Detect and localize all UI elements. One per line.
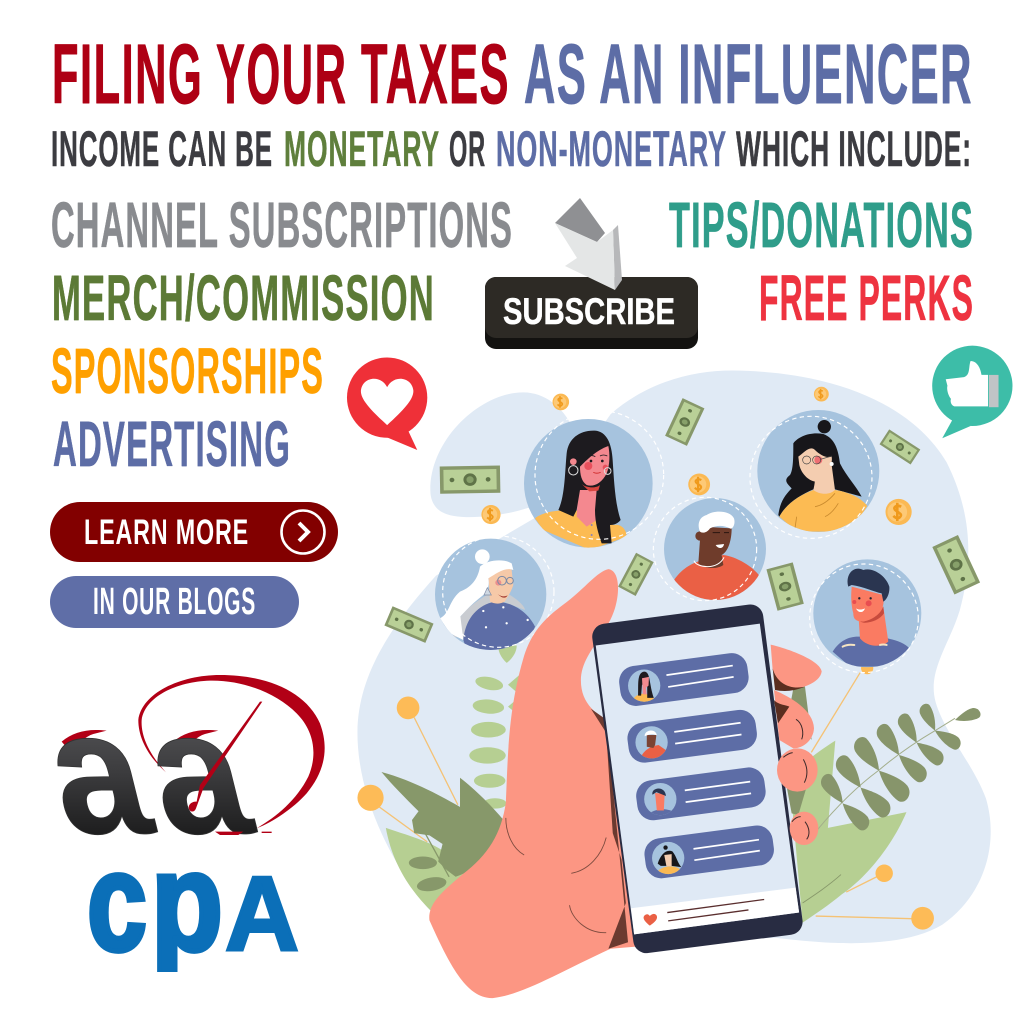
illustration backdrop bbox=[357, 371, 991, 951]
hand creases bbox=[506, 818, 606, 933]
title part: filing your taxes: FILING YOUR TAXES bbox=[52, 27, 510, 121]
logo swoosh bbox=[62, 675, 325, 828]
logo letters aa bbox=[26, 673, 268, 870]
button face bbox=[485, 277, 698, 338]
avatar: man with white hair bbox=[653, 497, 766, 603]
avatars right group bbox=[653, 410, 921, 673]
message card 3 bbox=[634, 766, 768, 822]
orange connector lines bbox=[379, 673, 912, 919]
icon: chevron circle bbox=[282, 510, 324, 554]
hand shadow bbox=[591, 709, 628, 949]
phone bbox=[596, 618, 799, 940]
message card 4 bbox=[643, 824, 776, 880]
light leaf bbox=[386, 828, 484, 912]
subscribe label: SUBSCRIBE bbox=[503, 291, 675, 332]
message card 1 bbox=[617, 651, 751, 708]
in our blogs button bbox=[50, 576, 299, 628]
coins bbox=[481, 387, 912, 525]
learn more button: LEARN MORE bbox=[84, 513, 249, 552]
hand: palm and thumb bbox=[429, 569, 637, 998]
hand: fingers bbox=[771, 645, 822, 845]
phone body bbox=[605, 618, 789, 940]
title bbox=[52, 27, 973, 121]
money bills bbox=[384, 398, 980, 643]
sprig bbox=[409, 833, 449, 893]
logo letters cpA bbox=[89, 872, 298, 972]
logo letters cpA: c bbox=[87, 823, 147, 980]
subtitle: INCOME CAN BE bbox=[51, 121, 273, 177]
logo: aa CPA bbox=[57, 675, 325, 972]
logo letters aa: a bbox=[26, 673, 168, 870]
item: sponsorships: SPONSORSHIPS bbox=[51, 335, 324, 407]
icon: arrow bbox=[555, 198, 622, 290]
avatar: older woman with white hair bbox=[435, 536, 554, 650]
item: merch and commission: MERCH/COMMISSION bbox=[52, 262, 435, 334]
bar lines bbox=[667, 899, 764, 921]
button base bbox=[485, 277, 698, 349]
right branch and olive stalks bbox=[787, 687, 982, 833]
subtitle bbox=[51, 121, 972, 177]
item: channel subscriptions: CHANNEL SUBSCRIPTIONS bbox=[51, 189, 513, 261]
learn more button bbox=[50, 502, 338, 562]
left plant bbox=[381, 645, 906, 923]
subscribe button with arrow bbox=[485, 198, 698, 349]
heart speech bubble bbox=[347, 357, 427, 450]
avatar: woman with hair bun bbox=[750, 410, 879, 538]
in our blogs button: IN OUR BLOGS bbox=[93, 581, 256, 623]
subtitle: MONETARY bbox=[284, 121, 440, 177]
logo letters cpA: p bbox=[151, 823, 223, 980]
heart icon bbox=[644, 914, 657, 926]
fern leaves bbox=[469, 645, 523, 809]
right big leaf bbox=[789, 741, 906, 923]
logo letters cpA: A bbox=[225, 855, 299, 973]
orange dots bbox=[357, 662, 934, 930]
subtitle: NON-MONETARY bbox=[496, 121, 727, 177]
avatar: man with dark hair bbox=[810, 559, 921, 673]
dark leaf bbox=[381, 772, 504, 877]
item: advertising: ADVERTISING bbox=[53, 408, 291, 480]
thumbs up speech bubble bbox=[932, 346, 1012, 438]
avatar: woman with long black hair bbox=[524, 411, 664, 550]
subtitle: OR bbox=[449, 121, 486, 177]
income type list bbox=[51, 189, 974, 480]
logo letters aa: a bbox=[126, 673, 268, 870]
logo slash bbox=[189, 702, 272, 835]
phone screen bbox=[596, 624, 799, 934]
bottom bar bbox=[631, 888, 799, 934]
avatars left pair bbox=[435, 411, 664, 650]
background blob bbox=[357, 371, 991, 951]
hand and phone bbox=[429, 569, 799, 998]
message card 2 bbox=[626, 708, 759, 765]
